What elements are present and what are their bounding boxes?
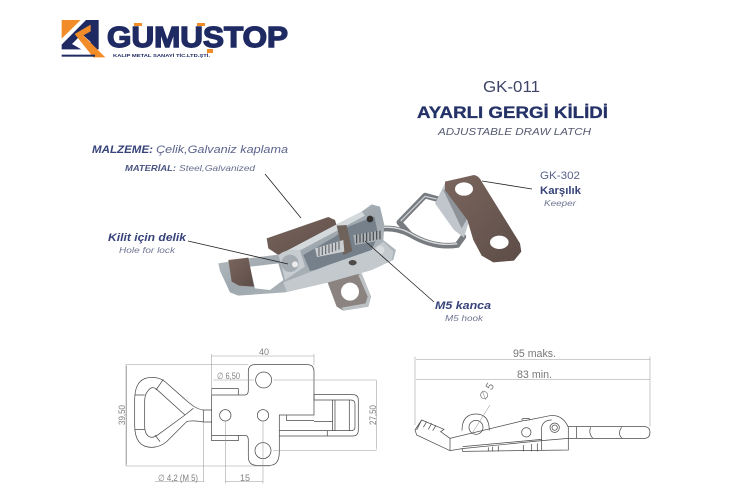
dimensions: side view: 83 min. (517, 369, 552, 381)
pointer: M5 hook (365, 241, 434, 302)
stud housing (337, 225, 352, 255)
inner recess (303, 217, 378, 271)
dimensions: top view: 40 (259, 347, 269, 357)
pointer: hole for lock (188, 241, 288, 264)
hole for lock (278, 250, 305, 280)
label: hole for lock (108, 232, 187, 255)
pointer: material (265, 174, 301, 218)
pointer: keeper (482, 181, 532, 189)
icon: logo mark (62, 20, 105, 57)
dimensions: side view: 95 maks. (513, 348, 556, 360)
subtitle: ADJUSTABLE DRAW LATCH (437, 126, 591, 138)
title: product code: GK-011 (483, 79, 540, 96)
dimensions: top view: ∅ 6,50 (217, 371, 240, 381)
latch photo (218, 175, 521, 311)
main lever (218, 204, 396, 296)
label: M5 hook: M5 kanca (435, 300, 491, 312)
dimensions: side view: ∅ 5 (477, 381, 497, 403)
logo accents (134, 23, 213, 53)
logo (62, 20, 288, 59)
logo wordmark: GUMUSTOP (107, 22, 288, 54)
technical drawing: side view (415, 357, 650, 451)
spring right (353, 230, 383, 245)
handle opening (250, 263, 283, 290)
label: material Turkish: MALZEME: (92, 144, 153, 156)
dimensions: top view (117, 347, 378, 483)
label: keeper (540, 170, 582, 208)
keeper plate and wire loop (380, 175, 521, 262)
dimensions: top view: 27,50 (368, 405, 378, 425)
logo tagline: KALIP METAL SANAYİ TİC.LTD.ŞTİ. (113, 52, 210, 59)
technical drawing: top view (126, 354, 377, 483)
rivet boss (376, 246, 384, 254)
back plate (267, 217, 339, 255)
lower rail (283, 242, 393, 292)
title: product name: AYARLI GERGİ KİLİDİ (417, 103, 608, 122)
dimensions: top view: 39,50 (117, 405, 127, 425)
label: material English: MATERİAL: (125, 163, 176, 173)
label: M5 hook: M5 hook (445, 313, 484, 323)
spring left (315, 240, 344, 257)
dimensions: top view: 15 (240, 473, 250, 483)
latch body (218, 204, 396, 311)
label: hole for lock: Hole for lock (119, 245, 176, 255)
bottom tab (327, 273, 371, 311)
label: material Turkish value: Çelik,Galvaniz kaplama (156, 144, 288, 156)
top rim highlight (280, 212, 365, 258)
label: M5 hook (435, 300, 491, 323)
label: keeper: Keeper (544, 198, 577, 208)
label: keeper: Karşılık (540, 185, 582, 197)
label: hole for lock: Kilit için delik (108, 232, 187, 244)
label: material English value: Steel,Galvanized (179, 163, 255, 173)
dimensions: top view: ∅ 4,2 (M 5) (158, 473, 198, 483)
dimensions: side view (477, 348, 556, 403)
label: keeper: GK-302 (540, 170, 580, 182)
handle pad (228, 258, 254, 287)
